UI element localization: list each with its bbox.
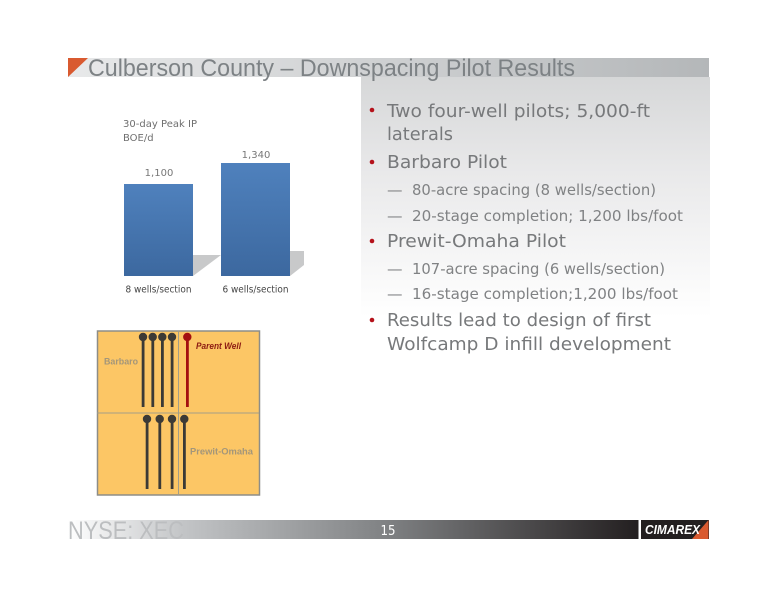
sub-bullets: Barbaro: 80-acre spacing (8 wells/section) <box>412 181 656 199</box>
sub-bullets: Barbaro: 20-stage completion; 1,200 lbs/foot <box>412 207 683 225</box>
sub-bullets: Prewit-Omaha: 16-stage completion;1,200 lbs/foot <box>412 285 678 303</box>
bar shadow: first <box>193 255 221 276</box>
parent well <box>183 333 192 407</box>
category label: 6 wells/section: 6 wells/section <box>222 284 288 296</box>
footer bar <box>68 517 638 545</box>
bullet: results: Wolfcamp D infill development <box>387 334 671 355</box>
Barbaro wells <box>139 333 176 407</box>
logo: Cimarex <box>641 520 709 539</box>
bar: 8 wells/section <box>124 184 193 276</box>
well map <box>97 331 260 495</box>
sub-bullets: Prewit-Omaha: 107-acre spacing (6 wells/section) <box>412 260 665 278</box>
bullet list <box>370 101 683 355</box>
title: Culberson County – Downspacing Pilot Results <box>88 55 575 82</box>
bar: 6 wells/section <box>221 163 290 276</box>
value: 1,100: 1,100 <box>145 168 173 179</box>
page number: 15 <box>380 524 396 539</box>
value: 1,340: 1,340 <box>242 150 270 161</box>
bullet: Prewit-Omaha Pilot: Prewit-Omaha Pilot <box>387 231 566 252</box>
sub-bullets: Barbaro <box>387 181 683 225</box>
sub-bullets: Barbaro: — <box>387 207 402 225</box>
background panel <box>361 77 710 317</box>
Prewit-Omaha wells <box>143 415 188 489</box>
sub-bullets: Prewit-Omaha: — <box>387 260 402 278</box>
bar shadow: second <box>290 251 304 276</box>
label: Prewit-Omaha: Prewit-Omaha <box>190 446 254 458</box>
bar chart <box>123 119 304 296</box>
sub-bullets: Prewit-Omaha <box>387 260 678 303</box>
label: Parent Well: Parent Well <box>196 341 241 351</box>
label: Barbaro: Barbaro <box>104 356 138 368</box>
sub-bullets: Prewit-Omaha: — <box>387 285 402 303</box>
icon: orange title triangle <box>68 58 88 77</box>
category label: 8 wells/section: 8 wells/section <box>126 284 192 296</box>
footer ticker: NYSE: XEC <box>68 517 184 545</box>
bullet: two four-well pilots: laterals <box>387 124 453 145</box>
logo: Cimarex: CIMAREX <box>645 523 701 537</box>
bullet: results <box>370 310 671 355</box>
bullet: two four-well pilots <box>370 101 650 145</box>
bullet: Barbaro Pilot: Barbaro Pilot <box>387 152 507 173</box>
bullet: results: Results lead to design of first <box>387 310 651 331</box>
chart unit: BOE/d <box>123 133 154 144</box>
title bar <box>68 55 709 82</box>
sub-bullets: Barbaro: — <box>387 181 402 199</box>
bullet: two four-well pilots: Two four-well pilots; 5,000-ft <box>386 101 650 122</box>
chart heading: 30-day Peak IP <box>123 119 197 130</box>
